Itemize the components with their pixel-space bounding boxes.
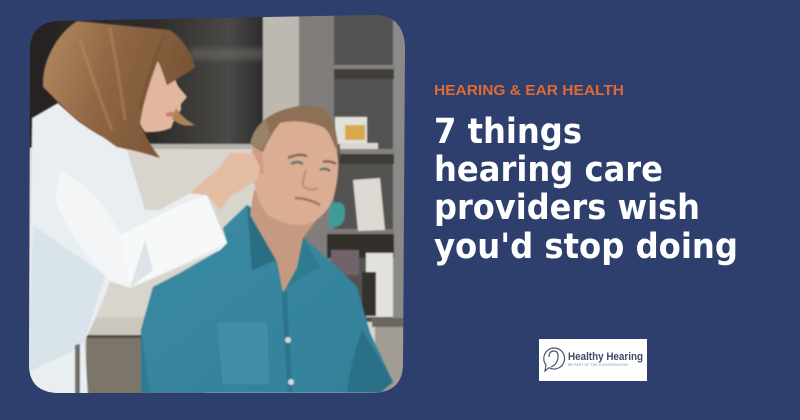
headline: providers wish <box>434 188 700 228</box>
tagline: BE PART OF THE CONVERSATION <box>568 363 628 367</box>
room background <box>25 10 410 400</box>
logo: Healthy Hearing <box>539 339 647 381</box>
category label: HEARING & EAR HEALTH <box>434 82 624 99</box>
photo: hearing care provider fitting a hearing aid on a patient <box>25 10 410 400</box>
icon: ear in speech bubble <box>544 348 565 371</box>
woman: face <box>139 60 188 134</box>
shelf objects <box>335 117 367 144</box>
infographic canvas <box>29 15 736 393</box>
woman: hair <box>43 21 195 158</box>
man: shirt <box>141 205 393 393</box>
woman: lab coat <box>28 103 227 394</box>
woman: hand on ear <box>190 153 260 210</box>
brand name: Healthy Hearing <box>568 351 643 363</box>
headline: 7 things <box>434 112 582 152</box>
headline: hearing care <box>434 150 663 190</box>
man: neck and head <box>250 105 339 293</box>
headline: you'd stop doing <box>434 227 738 267</box>
headline <box>434 112 738 267</box>
